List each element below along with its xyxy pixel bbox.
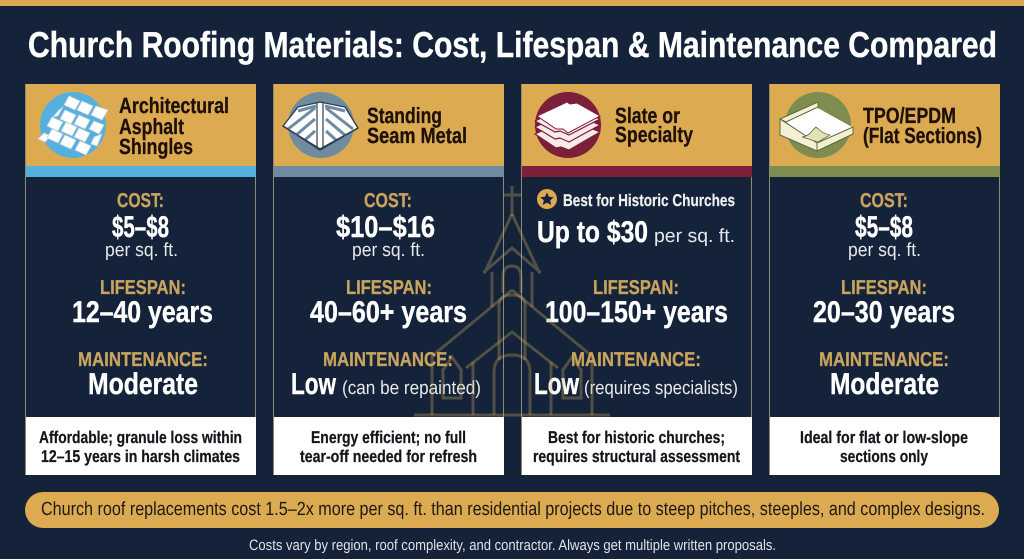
cost: TPO: COST: bbox=[860, 190, 908, 212]
cost: TPO: $5–$8 bbox=[855, 211, 913, 244]
name: TPO: (Flat Sections) bbox=[863, 123, 982, 148]
header: slate bbox=[522, 84, 752, 166]
color band: maroon bbox=[522, 166, 752, 177]
header: TPO bbox=[770, 84, 1000, 166]
cost: metal: per sq. ft. bbox=[352, 240, 425, 261]
maintenance: asphalt: Moderate bbox=[88, 368, 198, 401]
lifespan: metal: LIFESPAN: bbox=[346, 277, 432, 299]
note: asphalt: 12–15 years in harsh climates bbox=[41, 447, 240, 466]
panel: standing seam metal bbox=[274, 84, 504, 475]
top gold bar bbox=[0, 0, 1024, 6]
color band: blue bbox=[26, 166, 256, 177]
panel: architectural asphalt shingles bbox=[26, 84, 256, 475]
note: slate: Best for historic churches; bbox=[548, 428, 725, 447]
maintenance: slate bbox=[534, 349, 738, 401]
maintenance: slate: MAINTENANCE: bbox=[571, 349, 701, 371]
maintenance: TPO: MAINTENANCE: bbox=[819, 349, 949, 371]
icon: shingles bbox=[38, 92, 108, 158]
lifespan: TPO: LIFESPAN: bbox=[841, 277, 927, 299]
name: slate: Slate or bbox=[615, 103, 680, 128]
note: TPO: Ideal for flat or low-slope bbox=[800, 428, 968, 447]
cost: metal: COST: bbox=[364, 190, 412, 212]
cost: asphalt: COST: bbox=[117, 190, 164, 212]
maintenance: metal: MAINTENANCE: bbox=[323, 349, 453, 371]
name: metal bbox=[367, 103, 467, 148]
lifespan: asphalt bbox=[72, 277, 213, 329]
color band: olive bbox=[770, 166, 1000, 177]
cost: TPO bbox=[848, 190, 921, 261]
icon: metal roof bbox=[283, 92, 358, 158]
name: asphalt bbox=[119, 93, 229, 159]
maintenance: metal bbox=[291, 349, 481, 401]
cost: asphalt: $5–$8 bbox=[112, 211, 169, 244]
callout banner bbox=[25, 492, 999, 528]
panel: slate or specialty bbox=[522, 84, 752, 475]
cost: slate: Up to $30 bbox=[537, 216, 648, 249]
name: asphalt: Asphalt bbox=[119, 114, 185, 139]
lifespan: metal bbox=[310, 277, 467, 329]
note: asphalt bbox=[26, 417, 256, 475]
color band: slate blue bbox=[274, 166, 504, 177]
name: asphalt: Shingles bbox=[119, 134, 193, 159]
note: metal: Energy efficient; no full bbox=[311, 428, 466, 447]
icon: flat roof bbox=[780, 92, 853, 158]
lifespan: metal: 40–60+ years bbox=[310, 296, 467, 329]
maintenance: slate: (requires specialists) bbox=[584, 378, 738, 399]
maintenance: slate: Low bbox=[534, 368, 579, 401]
icon: star badge bbox=[537, 189, 557, 209]
maintenance: TPO: Moderate bbox=[830, 368, 939, 401]
cost: slate: per sq. ft. bbox=[654, 226, 735, 247]
panel: TPO/EPDM flat sections bbox=[770, 84, 1000, 475]
lifespan: TPO: 20–30 years bbox=[813, 296, 955, 329]
cost: metal: $10–$16 bbox=[336, 211, 435, 244]
cost: TPO: per sq. ft. bbox=[848, 240, 921, 261]
header: asphalt shingles bbox=[26, 84, 256, 166]
name: metal: Standing bbox=[367, 103, 442, 128]
maintenance: asphalt: MAINTENANCE: bbox=[78, 349, 208, 371]
maintenance: asphalt bbox=[78, 349, 208, 401]
cost: metal bbox=[336, 190, 435, 261]
badge text: Best for Historic Churches bbox=[563, 191, 735, 210]
maintenance: TPO bbox=[819, 349, 949, 401]
lifespan: slate: 100–150+ years bbox=[545, 296, 728, 329]
lifespan: TPO bbox=[813, 277, 955, 329]
name: asphalt: Architectural bbox=[119, 93, 229, 118]
note: TPO: sections only bbox=[840, 447, 928, 466]
note: slate bbox=[522, 417, 752, 475]
lifespan: slate bbox=[545, 277, 728, 329]
note: TPO bbox=[770, 417, 1000, 475]
header: metal bbox=[274, 84, 504, 166]
maintenance: metal: Low bbox=[291, 368, 336, 401]
maintenance: metal: (can be repainted) bbox=[342, 378, 481, 399]
lifespan: asphalt: 12–40 years bbox=[72, 296, 213, 329]
lifespan: slate: LIFESPAN: bbox=[593, 277, 679, 299]
cost: asphalt: per sq. ft. bbox=[105, 240, 178, 261]
name: slate bbox=[615, 103, 694, 147]
note: metal: tear-off needed for refresh bbox=[300, 447, 477, 466]
icon: slate stack bbox=[535, 92, 601, 158]
name: TPO bbox=[863, 103, 982, 148]
name: TPO: TPO/EPDM bbox=[863, 103, 956, 128]
note: asphalt: Affordable; granule loss within bbox=[39, 428, 242, 447]
cost: slate bbox=[537, 216, 735, 249]
church watermark bbox=[414, 186, 610, 415]
cost: asphalt bbox=[105, 190, 178, 261]
footer note: Costs vary by region, roof complexity, and contractor. Always get multiple written proposals. bbox=[249, 537, 776, 554]
lifespan: asphalt: LIFESPAN: bbox=[100, 277, 186, 299]
name: metal: Seam Metal bbox=[367, 123, 467, 148]
name: slate: Specialty bbox=[615, 122, 694, 147]
note: slate: requires structural assessment bbox=[533, 447, 740, 466]
note: metal bbox=[274, 417, 504, 475]
